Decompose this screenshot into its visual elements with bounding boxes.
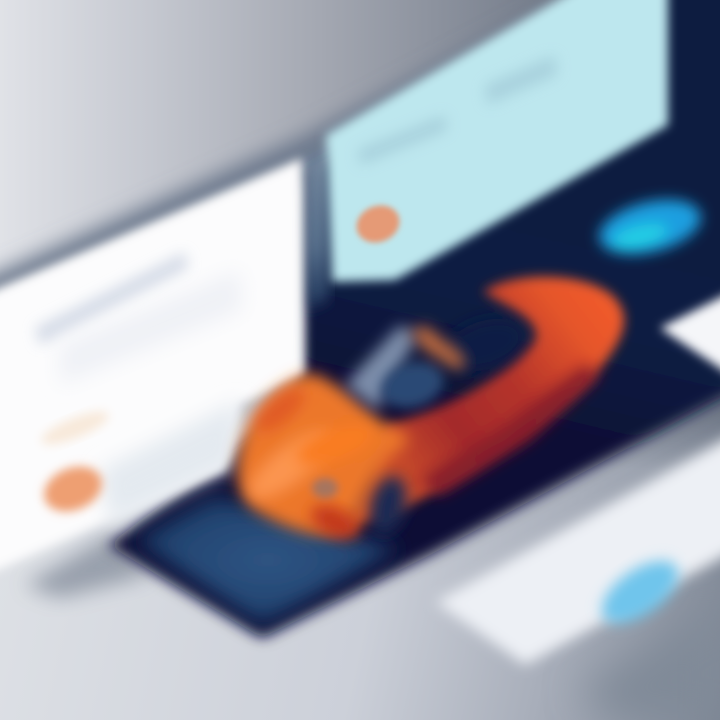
panel: lower right white card <box>436 428 720 665</box>
text placeholder: orange tint line <box>38 405 112 451</box>
panel: light blue listing card <box>326 0 668 282</box>
text placeholder: card column <box>485 55 557 105</box>
icon: orange car <box>238 277 624 546</box>
text placeholder: card heading <box>358 115 447 165</box>
seat dark blue <box>375 355 449 415</box>
panel: right white fragment <box>660 285 720 385</box>
panel: lower navy reflection <box>135 495 400 625</box>
panel: white listing card <box>0 158 304 580</box>
button: orange on white card <box>37 458 109 520</box>
front wheel <box>363 471 413 539</box>
hood highlight <box>240 420 340 510</box>
driver orange seat <box>410 325 465 372</box>
hood warm centre <box>292 416 378 474</box>
text placeholder: white card tint <box>100 400 240 525</box>
panel: dark navy surface <box>108 0 720 638</box>
cockpit interior dark <box>438 309 532 381</box>
front lower red <box>306 498 364 546</box>
button: blue oval on lower card <box>591 549 689 635</box>
icon: cyan oval button <box>593 190 707 264</box>
panel shadow band: top edge above panels <box>0 0 650 325</box>
button: orange on blue card <box>351 199 405 249</box>
hood dark left accent <box>249 382 311 438</box>
headlight <box>312 478 338 498</box>
panel: gap between cards <box>305 148 328 310</box>
panel: lower right grey wedge <box>580 610 720 720</box>
text placeholder: white card lines <box>60 270 242 385</box>
car rear body <box>345 277 624 530</box>
panel: left floor shadow <box>25 535 150 598</box>
body dark red underside <box>420 365 600 495</box>
text placeholder: white card heading <box>35 252 188 345</box>
car front hood <box>238 373 408 535</box>
windshield grey-blue <box>345 325 418 410</box>
